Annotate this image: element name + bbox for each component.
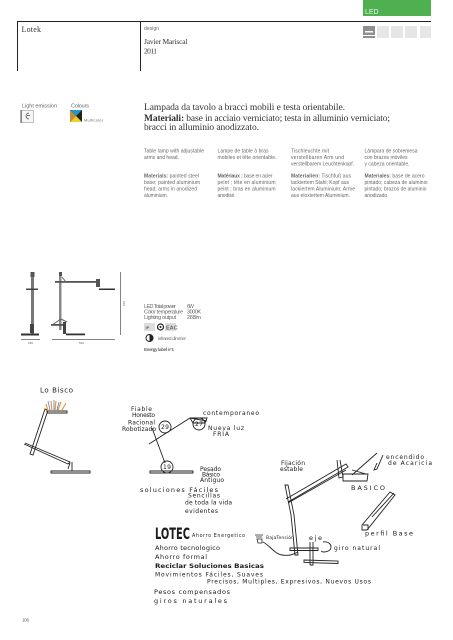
sketch: Lotec handwritten concept notes [154,524,371,605]
Spanish text: anodizado. [364,193,388,199]
sketch: articulated arm with base: Fijación [281,460,305,467]
English text: aluminium. [144,193,168,199]
sketch: Lotec handwritten concept notes: Ahorro Energetico [192,533,245,539]
LED specifications: 6W [187,304,195,310]
French text: peint ; tête en aluminium [218,180,276,186]
LED specifications: 288lm [187,315,201,321]
German text: Tischleuchte mit [291,148,330,154]
sketch: articulated arm with base: encendido [386,454,424,461]
sketch: annotated lamp diagram: Racional [128,420,155,426]
English text: arms and head. [144,155,179,161]
LED specifications: LED Total power [144,304,176,310]
English text [144,148,204,199]
French text: mobiles et tête orientable. [218,155,276,161]
German text: Materialien: Tischfuß aus [291,174,352,180]
Spanish text: con brazos móviles [364,155,408,161]
sketch: annotated lamp diagram: FRÍA [213,431,230,438]
Spanish text [364,148,428,199]
sketch: annotated lamp diagram [122,406,259,515]
Spanish text: Lámpara de sobremesa [364,148,418,154]
sketch: articulated arm with base: BajaTensión [266,534,294,541]
sketch: Lotec handwritten concept notes: Ahorro formal [155,553,207,561]
English text: head; arms in anodized [144,186,197,192]
light emission: Light emission [22,104,57,110]
sketch: articulated arm with base: giro natural [334,545,380,552]
Italian description: Lampada da tavolo a bracci mobili e testa orientabile. [144,103,345,113]
sketch: Lo Bisco lamp [24,386,90,473]
German text: lackiertem Aluminium; Arme [291,186,355,192]
product name: Lotek [22,25,41,34]
sketch: annotated lamp diagram: 27 [195,421,203,428]
header rules [17,21,431,71]
designer credit: Javier Mariscal [144,37,188,46]
sketch: annotated lamp diagram: de toda la vida [185,500,232,506]
infrared dimmer [146,334,186,342]
LED specifications: 3000K [187,310,201,316]
dimension lines: 525 [122,301,126,306]
sketch: annotated lamp diagram: Sencillas [188,492,220,500]
sketch: articulated arm with base: BASICO [351,484,385,492]
infrared dimmer: infrared dimmer [158,336,186,341]
sketch: articulated arm with base: eje [309,534,322,542]
sketch: Lotec handwritten concept notes: Precisos, Multiples, Expresivos, Nuevos Usos [207,578,371,586]
Italian description: Materiali: base in acciaio verniciato; testa in alluminio verniciato; [144,114,390,124]
Spanish text: Materiales: base de acero [364,174,425,180]
designer credit: design [144,26,159,32]
sketch: annotated lamp diagram: Antiguo [200,477,224,484]
dimension lines [21,272,126,345]
colours swatch: Colours [71,104,89,110]
sketch: Lotec handwritten concept notes: Reciclar Soluciones Basicas [155,562,264,570]
French text: Matériaux : base en acier [218,174,273,180]
sketch: annotated lamp diagram: evidentes [185,508,218,515]
certification marks [144,323,178,332]
sketch: Lotec handwritten concept notes: Movimientos Fáciles, Suaves [155,572,263,578]
German text: lackiertem Stahl; Kopf aus [291,180,350,186]
sketch: Lo Bisco lamp: Lo Bisco [40,386,73,394]
sketch: annotated lamp diagram: soluciones Fáciles [140,486,219,494]
Italian description: bracci in alluminio anodizzato. [144,123,259,133]
sketch: Lotec handwritten concept notes: giros naturales [154,597,228,605]
English text: base; painted aluminium [144,180,200,186]
dimension lines: 520 [79,341,84,345]
Spanish text: pintado; brazos de aluminio [364,186,427,192]
category icons [363,26,431,38]
LED specifications: Lighting output [144,315,176,321]
technical drawing: side view [21,272,39,336]
energy label: Energy label n°1 [144,347,174,352]
sketch: articulated arm with base: perfil Base [365,530,413,538]
technical drawing: front view [51,272,115,335]
sketch: annotated lamp diagram: contemporaneo [203,410,259,417]
sketch: Lotec handwritten concept notes: Ahorro tecnologico [155,544,220,552]
light emission [21,104,57,123]
French text: peint ; bras en aluminium [218,186,276,192]
sketch: annotated lamp diagram: 19 [163,464,171,471]
colours swatch: Multicolor [84,118,104,122]
sketch: Lotec handwritten concept notes: Pesos compensados [154,588,231,596]
English text: Materials: painted steel [144,174,199,180]
designer credit: 2011 [144,46,157,56]
sketch: annotated lamp diagram: Pesado [200,466,221,473]
LED specifications [144,304,201,321]
German text [291,148,355,199]
page number: 106 [22,618,29,622]
French text: Lampe de table à bras [218,148,269,154]
sketch: annotated lamp diagram: Básico [202,472,220,478]
colours swatch [70,104,104,122]
Spanish text: pintado; cabeza de aluminio [364,180,428,186]
sketch: annotated lamp diagram: Nueva luz [208,425,244,432]
French text: anodisé. [218,193,236,199]
English text: Table lamp with adjustable [144,148,204,154]
certification marks: EAC [166,326,178,332]
Spanish text: y cabeza orientable. [364,162,410,168]
category tab: LED [363,0,431,16]
dimension lines: 180 [28,341,33,345]
sketch: articulated arm with base: estable [280,466,303,473]
sketch: Lotec handwritten concept notes: LOTEC [155,524,190,543]
sketch: annotated lamp diagram: 29 [161,424,169,431]
sketch: annotated lamp diagram: Honesto [132,412,155,419]
French text [218,148,276,199]
LED specifications: Color temperature [144,310,183,316]
certification marks: IP [146,325,150,330]
German text: aus eloxiertem Aluminium. [291,193,350,199]
Italian description [144,103,390,133]
category tab: LED: LED [365,9,379,16]
sketch: articulated arm with base [255,453,432,565]
German text: verstellbarem Leuchtenkopf. [291,162,354,168]
sketch: articulated arm with base: de Acaricia [388,460,432,467]
German text: verstellbaren Arm und [291,155,344,161]
designer credit [144,26,188,56]
sketch: annotated lamp diagram: Fiable [131,406,152,413]
sketch: annotated lamp diagram: Robotizado [122,426,156,433]
